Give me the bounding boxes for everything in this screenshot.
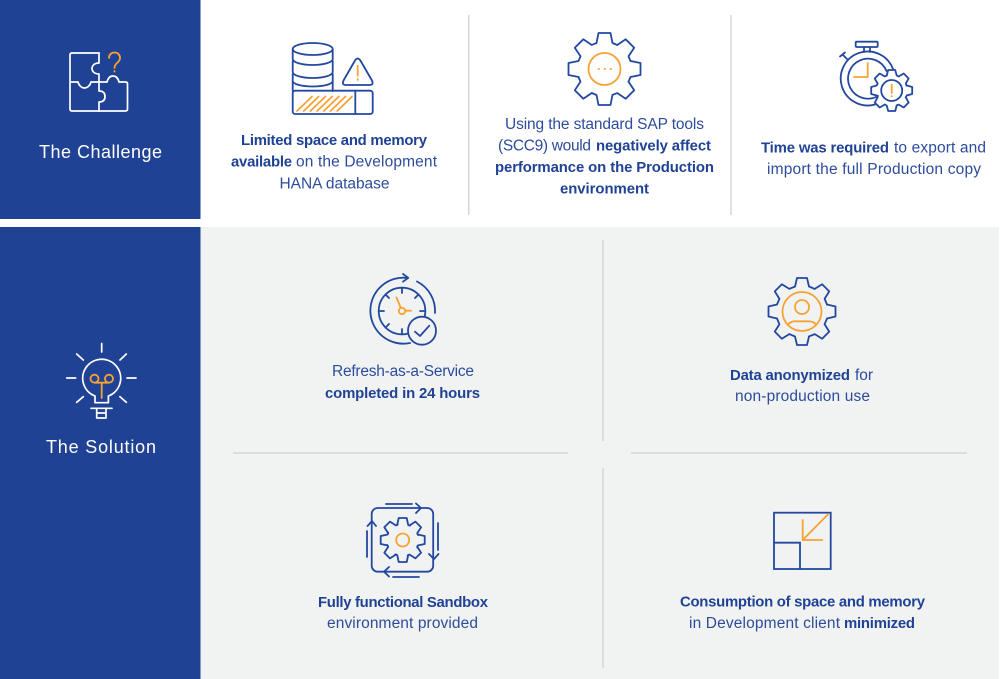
text: standard SAP tools: Using the standard SAP tools: [505, 116, 704, 133]
icon: database with warning: [293, 43, 373, 114]
text: consumption: Consumption of space and memory: [680, 594, 926, 610]
text: refresh as a service: [325, 363, 480, 402]
text: refresh as a service: Refresh-as-a-Service: [332, 363, 474, 380]
icon: gear with person: [768, 278, 836, 345]
icon: puzzle with question mark: [70, 52, 128, 111]
text: standard SAP tools: (SCC9) would: [498, 138, 591, 154]
panel: the solution: [0, 227, 999, 679]
text: time was required: import the full Production copy: [767, 161, 981, 178]
text: standard SAP tools: negatively affect: [596, 138, 711, 154]
icon: clock with refresh arrow and check: [370, 274, 436, 345]
item: refresh as a service: [325, 274, 480, 402]
text: data anonymized: Data anonymized: [730, 368, 850, 384]
text: limited space: Limited space and memory: [241, 133, 428, 149]
item: sandbox: [318, 504, 489, 632]
solution header block: [0, 227, 200, 679]
text: sandbox: Fully functional Sandbox: [318, 595, 489, 611]
text: data anonymized: non-production use: [735, 388, 870, 405]
challenge header block: [0, 0, 200, 219]
text: limited space: on the Development: [296, 154, 438, 170]
item: data anonymized: [730, 278, 873, 405]
icon: stopwatch with gear: [840, 42, 912, 111]
text: time was required: [761, 140, 986, 178]
text: standard SAP tools: environment: [560, 182, 649, 198]
item: time required: [761, 42, 986, 178]
text: limited space: HANA database: [280, 176, 390, 192]
text: time was required: Time was required: [761, 140, 889, 156]
heading: The Challenge: The Challenge: [39, 142, 162, 162]
text: limited space: available: [231, 154, 292, 170]
text: sandbox: [318, 595, 489, 632]
icon: gear with dots: [568, 33, 640, 105]
text: data anonymized: for: [855, 367, 873, 384]
text: consumption: minimized: [844, 616, 915, 632]
heading: The Solution: The Solution: [46, 437, 156, 457]
item: consumption minimized: [680, 513, 926, 632]
text: consumption: in Development client: [689, 615, 841, 632]
item: limited space and memory: [231, 43, 438, 192]
text: time was required: to export and: [894, 140, 986, 156]
text: standard SAP tools: [495, 116, 714, 198]
text: consumption: [680, 594, 926, 632]
text: standard SAP tools: performance on the Production: [495, 160, 714, 176]
item: negative performance: [495, 33, 714, 198]
icon: gear in cycle of arrows: [367, 504, 438, 577]
text: sandbox: environment provided: [327, 615, 478, 632]
text: refresh as a service: completed in 24 hours: [325, 386, 480, 402]
icon: light bulb: [67, 344, 136, 418]
text: limited space: [231, 133, 438, 192]
icon: shrinking square: [774, 513, 831, 569]
panel: the challenge: [0, 0, 1000, 219]
text: data anonymized: [730, 367, 873, 405]
